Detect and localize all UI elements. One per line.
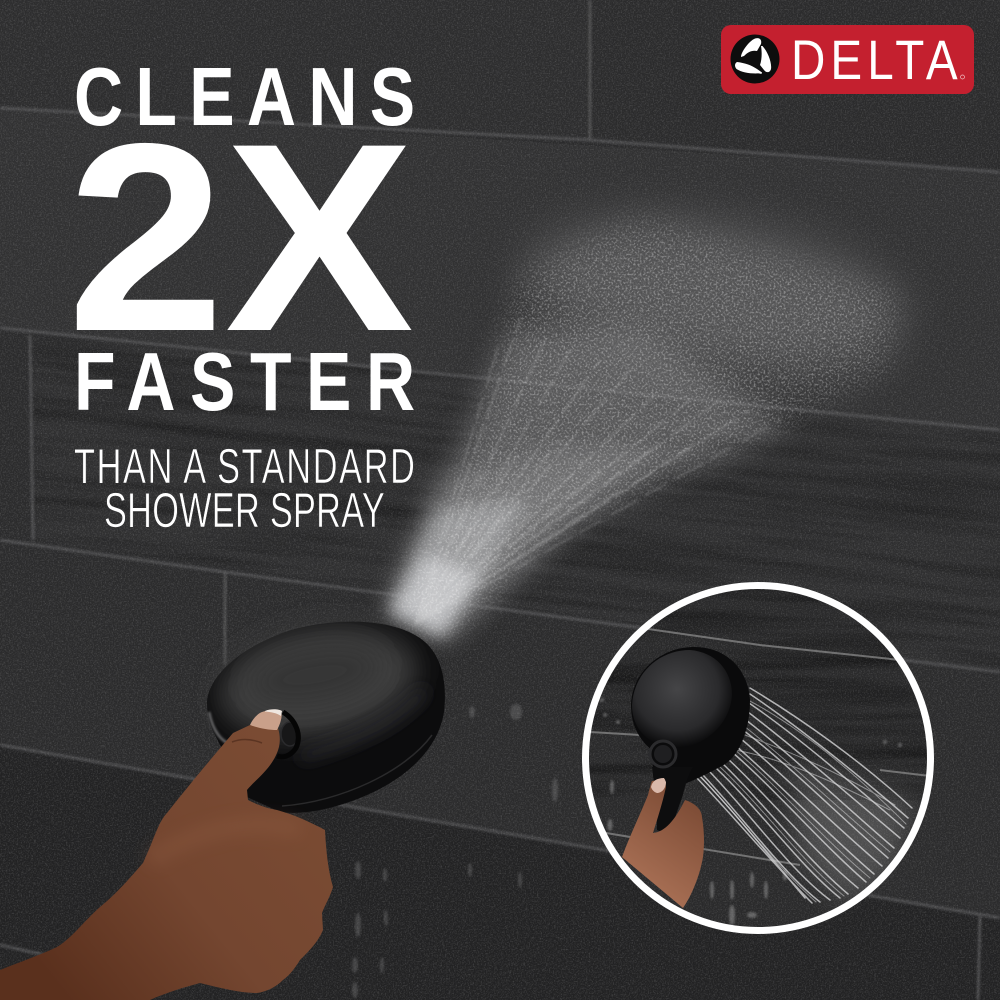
text: than a standard: THAN A STANDARD — [74, 439, 415, 493]
drips on wall — [352, 704, 558, 998]
logo: Delta badge — [721, 25, 974, 94]
fingernail — [250, 710, 282, 730]
heading: FASTER: FASTER — [74, 336, 415, 429]
logo: Delta badge: DELTA — [791, 29, 958, 92]
shower head: matte black hand shower — [207, 611, 445, 813]
spray jets — [692, 688, 915, 905]
radial water streaks — [415, 320, 780, 625]
button — [281, 722, 299, 746]
inset: circular photo of spray pattern — [585, 585, 931, 931]
icon: Delta triangle mark — [730, 34, 780, 84]
hand gripping the shower — [0, 709, 333, 1000]
heading: 2X: 2X — [67, 87, 415, 387]
white circle border — [586, 586, 930, 930]
spray: water fan from hand shower — [374, 196, 918, 653]
heading: CLEANS: CLEANS — [74, 51, 415, 144]
mini hand — [622, 779, 704, 908]
mini shower head — [631, 647, 750, 831]
text: shower spray: SHOWER SPRAY — [104, 483, 385, 537]
